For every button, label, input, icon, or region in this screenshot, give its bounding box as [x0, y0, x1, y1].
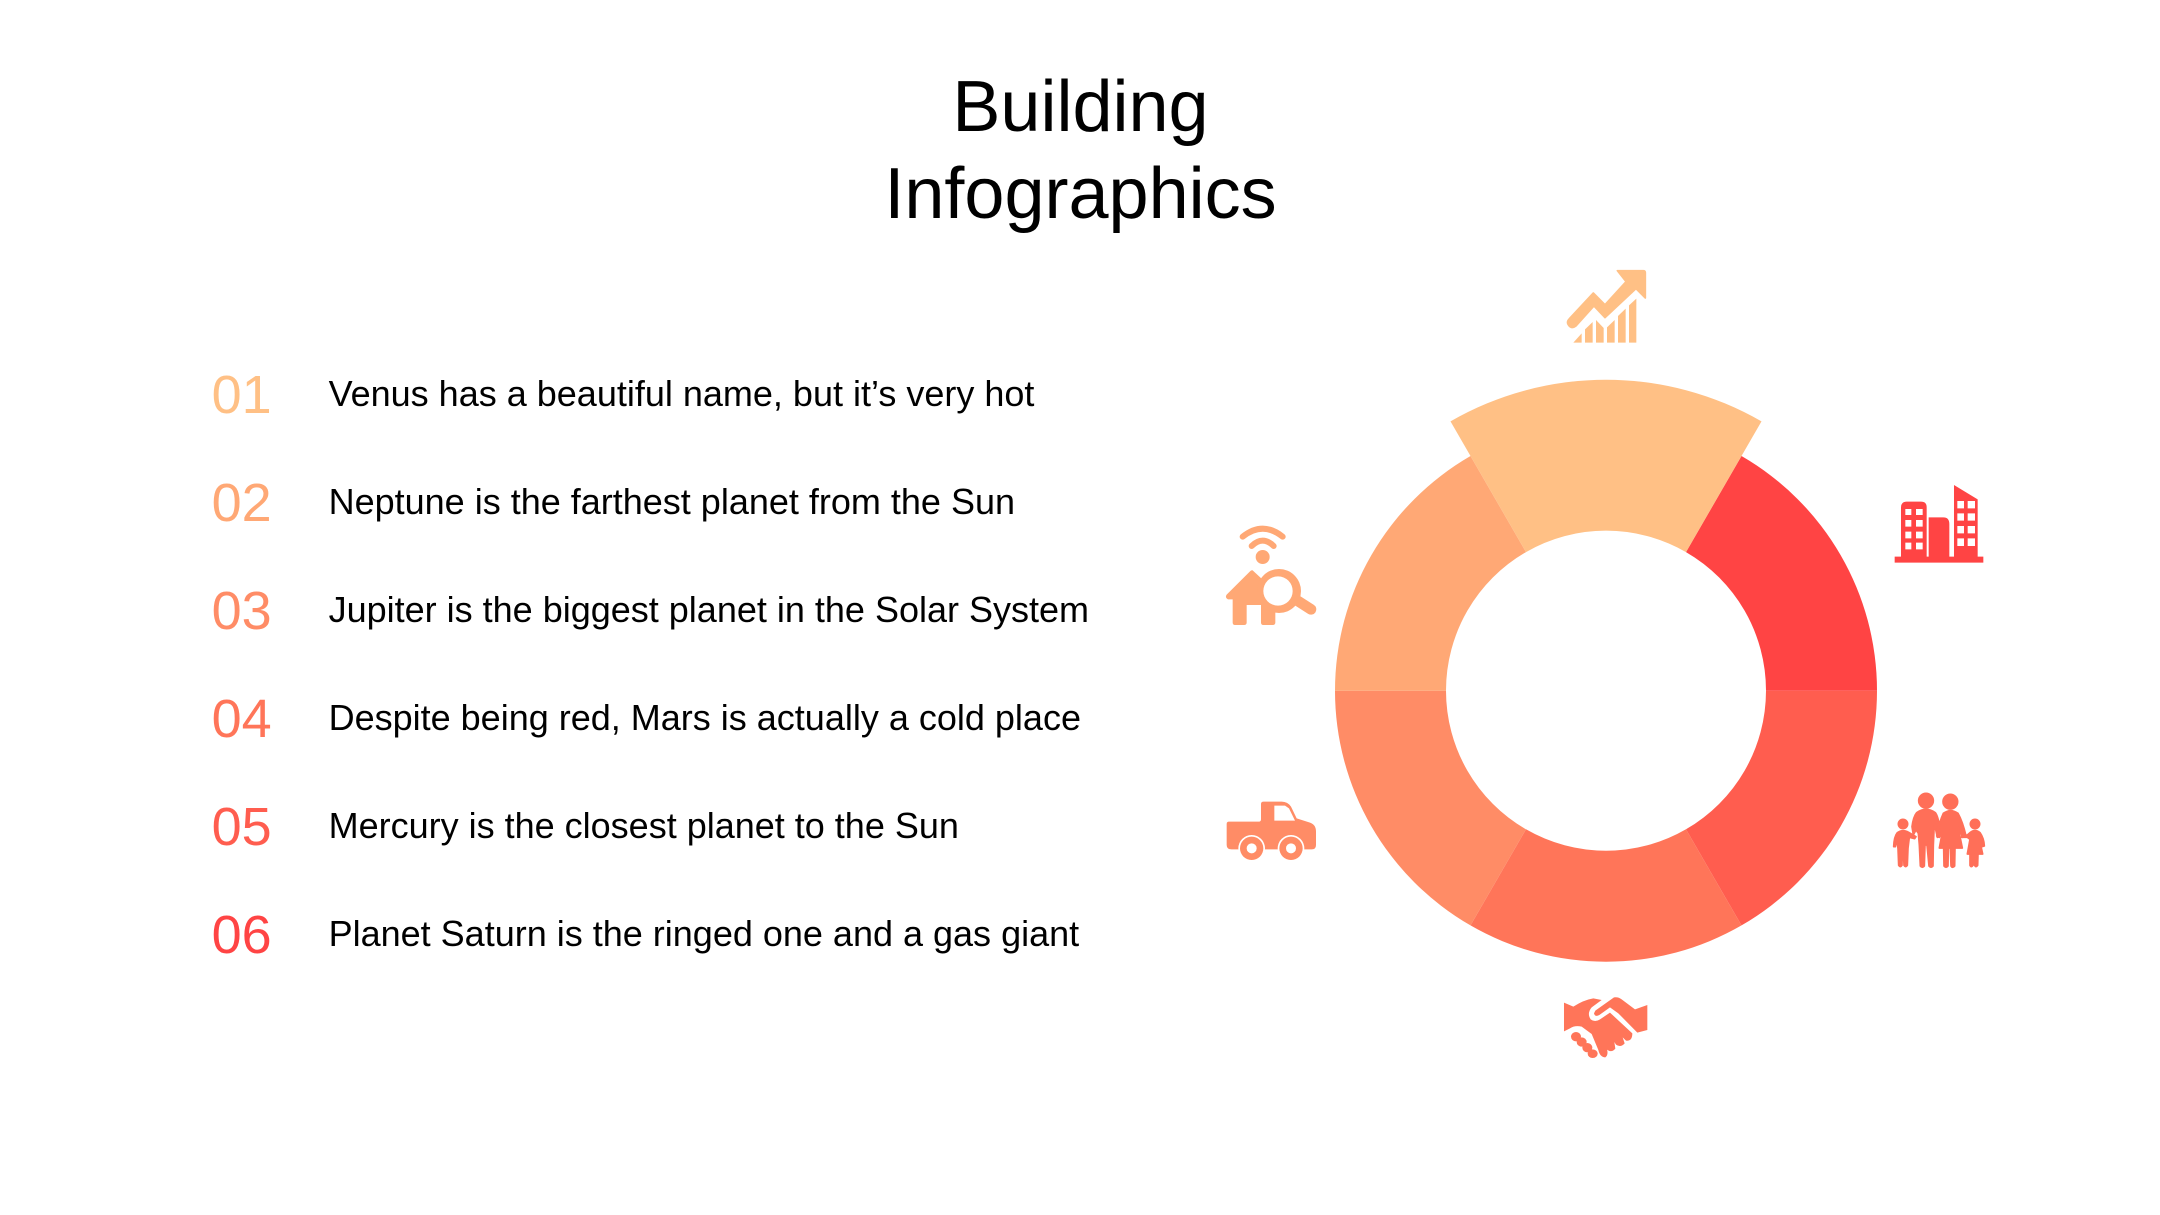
list item 02: [212, 472, 1015, 532]
list item 03: [212, 580, 1089, 640]
segment: highlighted top wedge: [1450, 380, 1762, 552]
icon: family: [1894, 793, 1984, 867]
icon: pickup truck: [1227, 802, 1316, 862]
list item 01: [212, 364, 1034, 424]
list item 03: 03: [212, 580, 272, 640]
list item 06: [212, 904, 1079, 964]
segment: upper left: [1335, 456, 1526, 691]
list item 05: [212, 796, 959, 856]
segment: lower right: [1686, 691, 1877, 925]
segment: lower left: [1335, 691, 1526, 925]
segment: upper right: [1686, 456, 1877, 691]
donut chart: [1335, 380, 1877, 962]
icon: smart home search: [1226, 529, 1311, 625]
icon: handshake: [1564, 997, 1647, 1058]
list item 04: [212, 688, 1081, 748]
list item 04: Despite being red, Mars is actually a cold place: [329, 697, 1081, 738]
list item 01: Venus has a beautiful name, but it’s very hot: [329, 373, 1034, 414]
icon: city buildings: [1895, 485, 1983, 563]
title: [884, 67, 1277, 234]
list item 06: 06: [212, 904, 272, 964]
title: Infographics: [884, 154, 1277, 234]
list item 05: 05: [212, 796, 272, 856]
list item 01: 01: [212, 364, 272, 424]
list item 05: Mercury is the closest planet to the Sun: [329, 805, 959, 846]
list item 02: 02: [212, 472, 272, 532]
list item 02: Neptune is the farthest planet from the Sun: [329, 481, 1015, 522]
numbered list: [212, 364, 1089, 964]
segment: bottom: [1470, 829, 1742, 962]
title: Building: [952, 67, 1209, 147]
list item 04: 04: [212, 688, 272, 748]
list item 06: Planet Saturn is the ringed one and a gas giant: [329, 913, 1079, 954]
icon: growth chart: [1567, 271, 1645, 343]
list item 03: Jupiter is the biggest planet in the Solar System: [329, 589, 1089, 630]
